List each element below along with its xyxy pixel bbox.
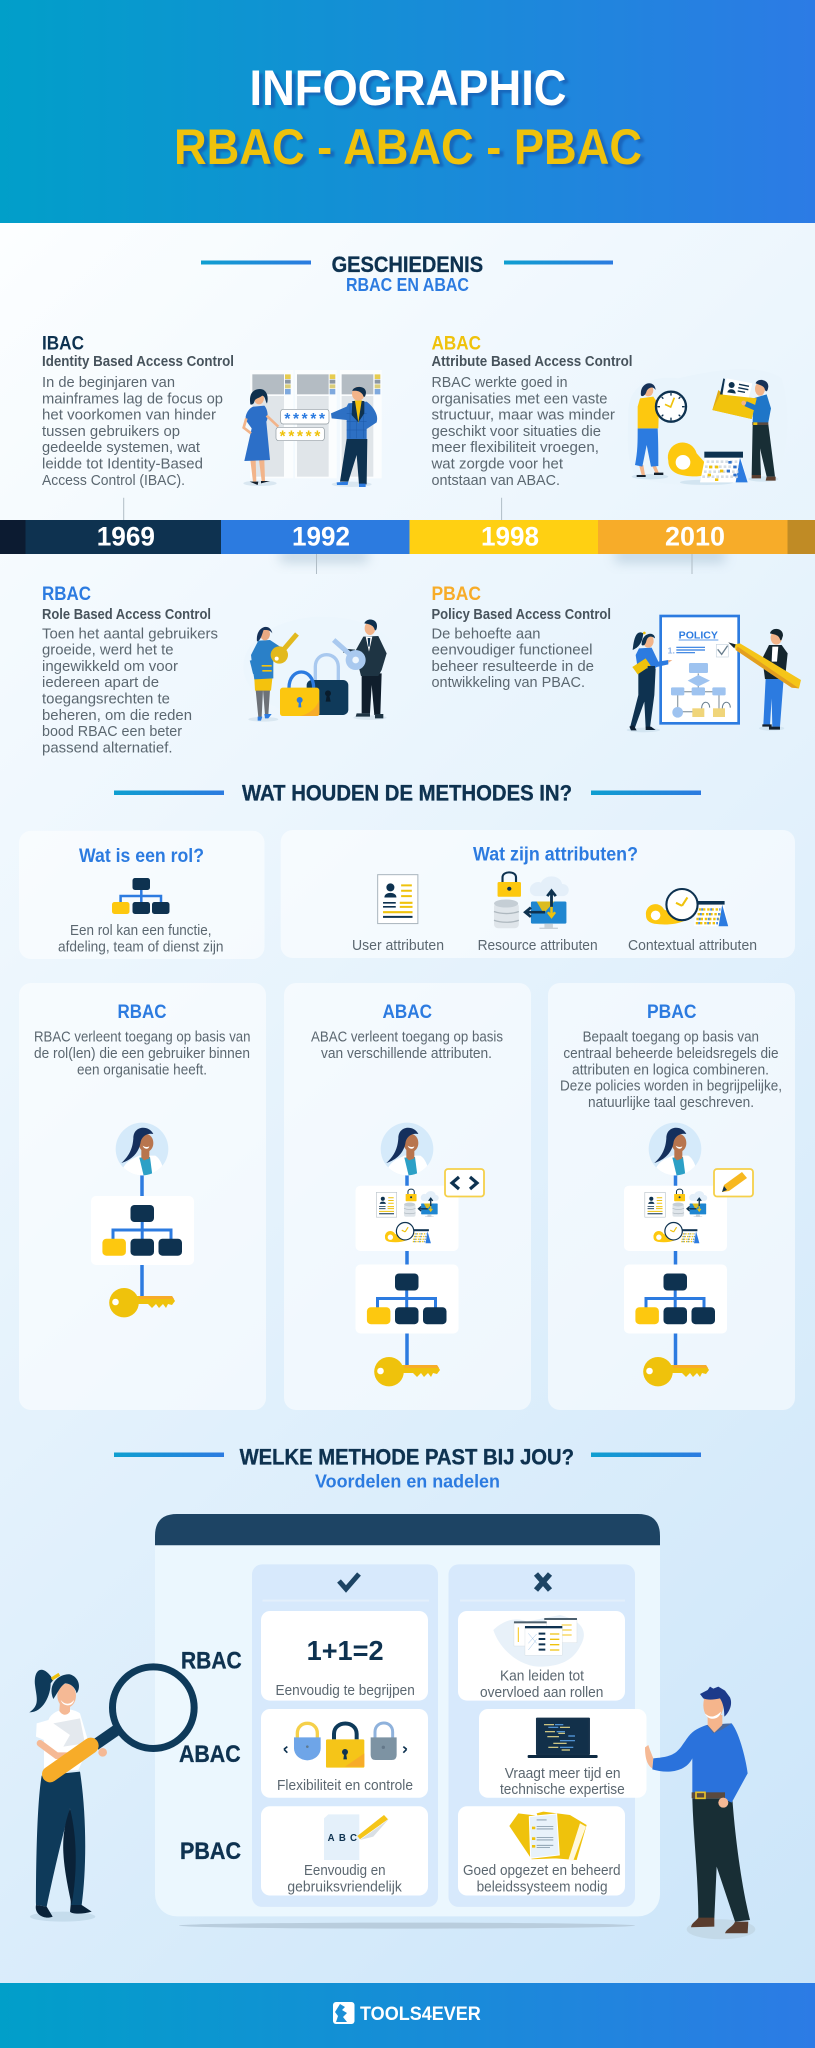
text block: RBAC: groeide, werd het te bbox=[42, 642, 174, 659]
text block: ABAC: ABAC bbox=[432, 334, 481, 354]
text block: IBAC: leidde tot Identity-Based bbox=[42, 456, 203, 472]
heading: welke methode past bij jou bbox=[114, 1444, 701, 1492]
column: nadelen: technische expertise bbox=[500, 1782, 625, 1798]
heading: welke methode past bij jou: WELKE METHODE PAST BIJ JOU? bbox=[240, 1444, 574, 1470]
icon: user document bbox=[378, 875, 418, 924]
panel: wat zijn attributen: User attributen bbox=[352, 938, 444, 954]
text block: RBAC: bood RBAC een beter bbox=[42, 723, 182, 740]
text block: PBAC: Policy Based Access Control bbox=[432, 607, 611, 623]
icon: check bbox=[339, 1574, 359, 1589]
icon: avatar bbox=[381, 1123, 433, 1176]
column: nadelen: beleidssysteem nodig bbox=[477, 1879, 608, 1895]
footer band bbox=[0, 1983, 815, 2048]
text block: RBAC: beheren, om die reden bbox=[42, 707, 192, 724]
text block: PBAC: ontwikkeling van PBAC. bbox=[432, 674, 585, 691]
text block: RBAC bbox=[42, 584, 218, 756]
timeline bbox=[0, 498, 815, 574]
attribute box bbox=[624, 1186, 727, 1251]
panel: PBAC method: PBAC bbox=[647, 1002, 697, 1023]
text block: PBAC: PBAC bbox=[432, 584, 481, 605]
column: nadelen bbox=[448, 1564, 646, 1907]
panel: PBAC method bbox=[548, 983, 795, 1410]
text block: ABAC: ontstaan van ABAC. bbox=[432, 472, 560, 489]
org chart bbox=[356, 1264, 458, 1334]
title bbox=[174, 60, 642, 175]
illustration: ABAC clock, folder, calendar bbox=[628, 369, 787, 485]
org chart bbox=[91, 1196, 194, 1265]
illustration: woman with magnifier bbox=[29, 1667, 194, 1922]
icon: key bbox=[374, 1357, 440, 1386]
column: nadelen: Kan leiden tot bbox=[500, 1668, 584, 1684]
text block: IBAC bbox=[42, 334, 234, 489]
icon: key bbox=[109, 1288, 175, 1317]
panel: wat zijn attributen: Wat zijn attributen? bbox=[473, 844, 638, 866]
footer band: TOOLS4EVER bbox=[360, 2003, 481, 2025]
title: RBAC - ABAC - PBAC bbox=[174, 119, 642, 175]
text block: PBAC bbox=[432, 584, 611, 691]
text block: RBAC: Role Based Access Control bbox=[42, 607, 211, 623]
icon: cross bbox=[536, 1574, 550, 1590]
text block: RBAC: ingewikkeld om voor bbox=[42, 658, 178, 675]
text block: IBAC: IBAC bbox=[42, 334, 84, 354]
panel: ABAC method bbox=[284, 983, 531, 1410]
panel: ABAC method: van verschillende attributen. bbox=[321, 1046, 492, 1062]
heading: geschiedenis: RBAC EN ABAC bbox=[346, 275, 469, 295]
title: INFOGRAPHIC bbox=[250, 60, 566, 116]
panel: PBAC method: centraal beheerde beleidsregels die bbox=[563, 1046, 779, 1062]
column: voordelen bbox=[252, 1564, 438, 1907]
timeline: 2010 bbox=[665, 522, 725, 552]
text block: IBAC: tussen gebruikers op bbox=[42, 423, 180, 440]
text block: ABAC: RBAC werkte goed in bbox=[432, 374, 568, 391]
panel: PBAC method: Deze policies worden in begrijpelijke, bbox=[560, 1079, 782, 1095]
heading: welke methode past bij jou: Voordelen en nadelen bbox=[315, 1472, 500, 1492]
column: voordelen: Flexibiliteit en controle bbox=[277, 1778, 413, 1794]
text block: RBAC: RBAC bbox=[42, 584, 91, 605]
illustration: IBAC server room: ***** bbox=[280, 428, 320, 445]
text block: PBAC: beheer resulteerde in de bbox=[432, 658, 594, 675]
panel: wat zijn attributen bbox=[281, 830, 795, 958]
row labels: RBAC bbox=[181, 1648, 242, 1674]
icon: role windows bbox=[493, 1615, 584, 1667]
comparison board bbox=[155, 1514, 660, 1929]
illustration: IBAC server room: ***** bbox=[284, 411, 325, 428]
text block: IBAC: gedeelde systemen, wat bbox=[42, 439, 201, 456]
row labels bbox=[179, 1648, 242, 1865]
org chart bbox=[624, 1264, 727, 1334]
text block: ABAC: wat zorgde voor het bbox=[431, 456, 564, 472]
icon: locks bbox=[284, 1723, 407, 1768]
panel: RBAC method: RBAC bbox=[118, 1002, 167, 1023]
text block: IBAC: In de beginjaren van bbox=[42, 374, 175, 391]
timeline: 1998 bbox=[481, 522, 539, 552]
text block: ABAC: meer flexibiliteit vroegen, bbox=[432, 439, 599, 456]
row labels: PBAC bbox=[180, 1838, 241, 1865]
panel: RBAC method: de rol(len) die een gebruiker binnen bbox=[34, 1046, 250, 1062]
panel: wat zijn attributen: Resource attributen bbox=[478, 938, 598, 954]
column: nadelen: Goed opgezet en beheerd bbox=[463, 1863, 621, 1879]
badge: pencil bbox=[714, 1169, 753, 1196]
column: voordelen: 1+1=2 bbox=[307, 1635, 384, 1666]
icon: ABC pencil bbox=[324, 1814, 389, 1860]
text block: PBAC: De behoefte aan bbox=[432, 625, 540, 642]
panel: wat is een rol: afdeling, team of dienst zijn bbox=[58, 939, 224, 955]
text block: RBAC: passend alternatief. bbox=[42, 739, 172, 756]
icon: resource bbox=[494, 872, 569, 929]
illustration: RBAC locks and keys bbox=[243, 617, 403, 722]
illustration: PBAC policy board bbox=[627, 616, 801, 732]
icon: folders bbox=[509, 1812, 587, 1861]
heading: wat houden de methodes in bbox=[114, 780, 701, 806]
column: nadelen: overvloed aan rollen bbox=[480, 1685, 603, 1701]
panel: ABAC method: ABAC bbox=[382, 1002, 432, 1023]
attribute box bbox=[356, 1186, 458, 1251]
icon: avatar bbox=[116, 1123, 168, 1176]
panel: wat zijn attributen: Contextual attributen bbox=[628, 938, 757, 954]
text block: ABAC: structuur, maar was minder bbox=[432, 407, 615, 424]
column: voordelen: gebruiksvriendelijk bbox=[287, 1879, 403, 1895]
panel: RBAC method: een organisatie heeft. bbox=[77, 1062, 207, 1078]
text block: IBAC: het voorkomen van hinder bbox=[42, 407, 216, 424]
illustration: PBAC policy board: 1. bbox=[668, 645, 675, 655]
text block: ABAC: organisaties met een vaste bbox=[432, 390, 608, 407]
panel: PBAC method: Bepaalt toegang op basis van bbox=[583, 1030, 759, 1046]
column: nadelen: Vraagt meer tijd en bbox=[505, 1766, 621, 1782]
panel: ABAC method: ABAC verleent toegang op basis bbox=[311, 1030, 503, 1046]
illustration: man pointing bbox=[645, 1687, 755, 1939]
text block: RBAC: iedereen apart de bbox=[42, 674, 159, 691]
icon: context bbox=[646, 889, 728, 926]
illustration: IBAC server room bbox=[243, 370, 382, 487]
timeline: 1969 bbox=[97, 522, 155, 552]
heading: geschiedenis: GESCHIEDENIS bbox=[332, 252, 483, 277]
text block: ABAC bbox=[431, 334, 632, 489]
icon: ABC pencil: ABC bbox=[328, 1833, 357, 1844]
panel: RBAC method bbox=[19, 983, 266, 1410]
icon: org chart bbox=[112, 878, 170, 914]
icon: avatar bbox=[649, 1123, 701, 1176]
panel: wat is een rol: Een rol kan een functie, bbox=[70, 923, 212, 939]
text block: RBAC: Toen het aantal gebruikers bbox=[42, 625, 218, 642]
illustration: PBAC policy board: POLICY bbox=[679, 630, 719, 641]
badge: code bbox=[445, 1169, 484, 1196]
text block: IBAC: Identity Based Access Control bbox=[42, 354, 234, 370]
header band bbox=[0, 0, 815, 223]
panel: wat is een rol: Wat is een rol? bbox=[79, 846, 204, 867]
panel: RBAC method: RBAC verleent toegang op basis van bbox=[34, 1030, 250, 1046]
text block: ABAC: geschikt voor situaties die bbox=[432, 423, 601, 440]
row labels: ABAC bbox=[179, 1741, 241, 1768]
column: voordelen: Eenvoudig en bbox=[304, 1863, 386, 1879]
text block: IBAC: mainframes lag de focus op bbox=[42, 390, 223, 407]
column: voordelen: Eenvoudig te begrijpen bbox=[276, 1683, 415, 1699]
text block: ABAC: Attribute Based Access Control bbox=[432, 354, 632, 370]
panel: PBAC method: attributen en logica combineren. bbox=[572, 1062, 769, 1078]
icon: key bbox=[643, 1357, 709, 1386]
logo mark bbox=[333, 2002, 354, 2024]
text block: IBAC: Access Control (IBAC). bbox=[42, 472, 185, 489]
icon: laptop bbox=[528, 1718, 598, 1758]
panel: wat is een rol bbox=[19, 831, 264, 959]
panel: PBAC method: natuurlijke taal geschreven. bbox=[588, 1095, 754, 1111]
text block: PBAC: eenvoudiger functioneel bbox=[432, 642, 592, 659]
timeline: 1992 bbox=[292, 522, 350, 552]
heading: geschiedenis bbox=[201, 252, 613, 295]
heading: wat houden de methodes in: WAT HOUDEN DE METHODES IN? bbox=[242, 780, 572, 806]
text block: RBAC: toegangsrechten te bbox=[42, 690, 170, 708]
